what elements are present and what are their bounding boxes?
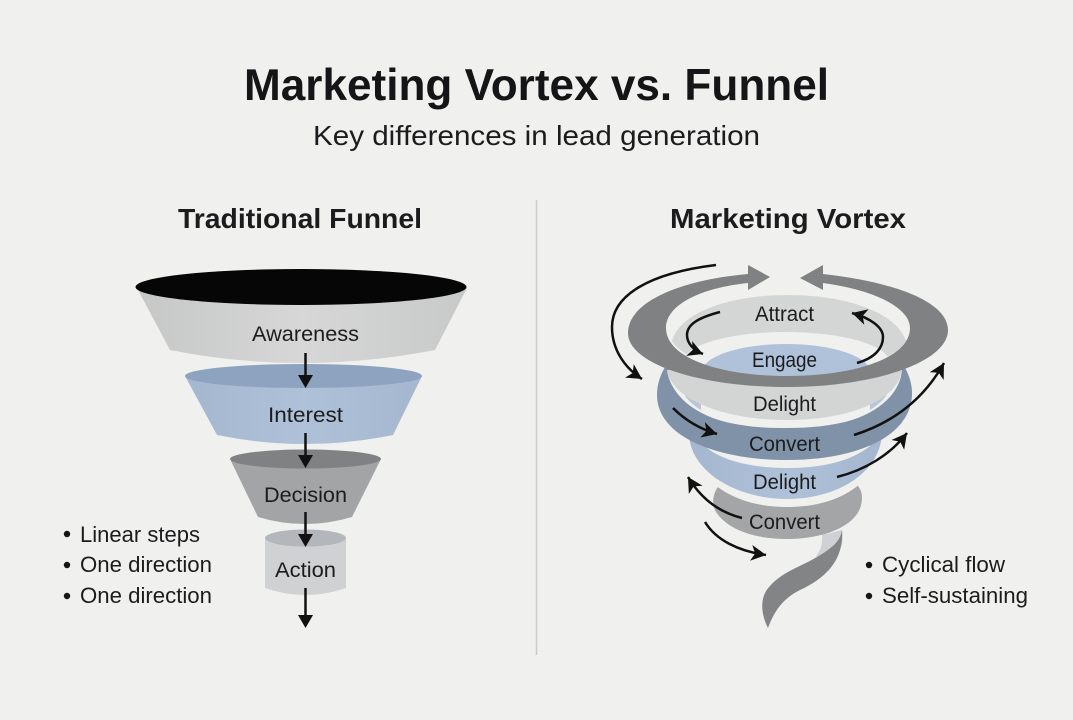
funnel stage: awareness: Awareness xyxy=(252,323,359,346)
funnel bullet list xyxy=(64,522,212,608)
vortex band: delight lower: Delight xyxy=(753,471,816,494)
vortex diagram xyxy=(612,265,948,628)
funnel bullet list: One direction xyxy=(80,552,212,577)
funnel stage: action: Action xyxy=(275,559,336,582)
vortex bullet list xyxy=(866,552,1028,608)
vortex band: convert lower: Convert xyxy=(749,511,820,534)
funnel stage: decision: Decision xyxy=(264,484,347,507)
vortex bullet list: Self-sustaining xyxy=(882,583,1028,608)
funnel bullet list: Linear steps xyxy=(80,522,200,547)
funnel bullet list: One direction xyxy=(80,583,212,608)
title: Marketing Vortex vs. Funnel xyxy=(244,61,829,110)
heading: marketing vortex: Marketing Vortex xyxy=(670,203,906,234)
vortex circulation arrows xyxy=(612,265,944,555)
vortex bullet list: Cyclical flow xyxy=(882,552,1005,577)
vortex inner: attract and engage: Engage xyxy=(752,349,817,372)
heading: traditional funnel: Traditional Funnel xyxy=(178,203,422,234)
funnel stage: action xyxy=(265,530,346,595)
vortex band: convert upper xyxy=(657,360,912,468)
funnel arrows xyxy=(298,353,313,628)
funnel stage: interest xyxy=(185,364,422,444)
vortex inner: attract and engage: Attract xyxy=(755,303,814,326)
funnel stage: interest: Interest xyxy=(268,404,343,427)
vortex band: convert upper: Convert xyxy=(749,433,820,456)
funnel stage: decision xyxy=(230,450,381,524)
funnel stage: awareness xyxy=(136,269,467,363)
vortex tail xyxy=(762,530,843,628)
subtitle: Key differences in lead generation xyxy=(313,120,760,151)
vortex band: convert upper: Delight xyxy=(753,393,816,416)
funnel diagram xyxy=(136,269,467,628)
vortex band: convert lower xyxy=(713,485,862,539)
vortex top ring with arrowheads xyxy=(628,265,948,387)
vortex inner: attract and engage xyxy=(672,295,906,376)
vortex band: delight lower xyxy=(689,428,882,507)
